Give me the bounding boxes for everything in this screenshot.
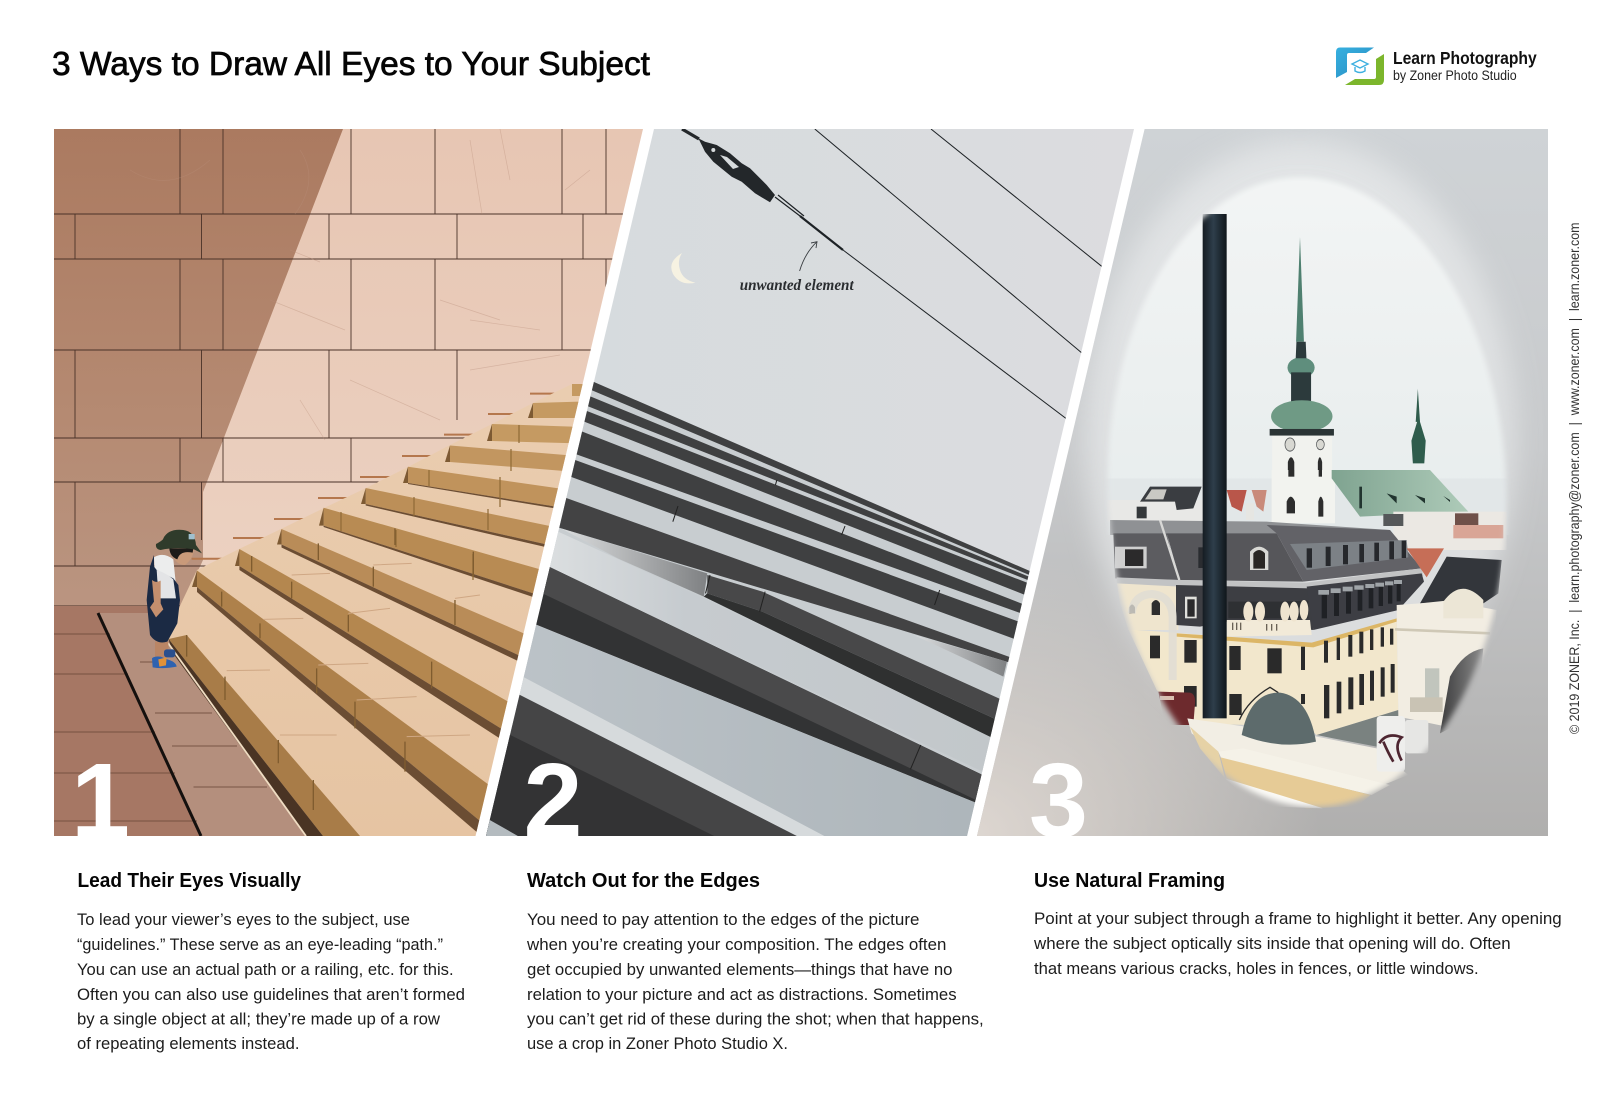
body text 2: [526, 911, 984, 1053]
dormer caps: [1318, 580, 1402, 595]
main ridge light roof: [1110, 520, 1393, 537]
shoe accents: [158, 657, 167, 667]
ornate gable: [1443, 589, 1483, 618]
annotation arrow: [800, 242, 817, 271]
upper dormer windows: [1307, 541, 1406, 568]
sill tan side: [1190, 727, 1225, 778]
body text 1: “guidelines.” These serve as an eye-leading “path.”: [77, 936, 443, 954]
facade cornice: [1117, 568, 1423, 589]
roof dormers: [1359, 487, 1450, 508]
child legs: [155, 642, 168, 657]
wire turnbuckle: [682, 129, 775, 202]
pale skylight: [1145, 489, 1167, 499]
wall block joints: [54, 129, 640, 606]
tier window: [1185, 597, 1197, 618]
right lower dormers: [1322, 584, 1401, 618]
red roofs: [1227, 490, 1247, 512]
view through the oval: [1089, 158, 1536, 808]
left roof slope: [1113, 533, 1178, 580]
small white tower: [1246, 503, 1254, 520]
panel 2: photo of wires and building: [470, 129, 1150, 860]
dark upper building stripes: [559, 382, 1030, 662]
child hair: [169, 548, 193, 559]
dark arch: [1440, 648, 1483, 733]
stair shadows under risers: [169, 483, 577, 852]
middle band underside: [704, 593, 1007, 742]
child shirt: [154, 554, 176, 582]
logo wordmark: Learn Photography: [1393, 48, 1537, 68]
pale stair edge line: [168, 643, 306, 836]
stair treads: [168, 384, 582, 836]
body text 2: when you’re creating your composition. The edges often: [526, 936, 946, 954]
window frame post: [1203, 214, 1227, 718]
warm glow bottom-left: [970, 429, 1470, 836]
right ornate building: [1397, 601, 1497, 727]
belfry: [1291, 372, 1311, 405]
cable in the glass: [1379, 735, 1402, 762]
tier window glass: [1187, 599, 1195, 617]
column 2 text: [526, 870, 984, 1053]
light corner: [485, 818, 518, 836]
stair end notches: [192, 403, 533, 587]
child arm and hand: [150, 580, 163, 617]
balcony dark windows: [1228, 601, 1308, 618]
building base: [510, 382, 1030, 836]
body text 1: Often you can also use guidelines that aren’t formed: [77, 986, 465, 1004]
tower base: [1272, 470, 1335, 523]
child face: [174, 550, 194, 565]
right window: [1425, 668, 1439, 699]
body text 3: Point at your subject through a frame to highlight it better. Any opening: [1034, 910, 1562, 928]
title: 3 Ways to Draw All Eyes to Your Subject: [52, 45, 650, 82]
dark chimney: [1383, 514, 1403, 526]
second glass: [1405, 720, 1428, 753]
body text 2: You need to pay attention to the edges of the picture: [527, 911, 919, 929]
facade windows: [1150, 627, 1395, 718]
centre dormer: [1250, 547, 1268, 570]
upper scene: sky and church: [1089, 158, 1536, 535]
lantern base: [1296, 342, 1306, 358]
right white buildings: [1393, 512, 1507, 550]
left framed window: [1115, 547, 1147, 568]
left cream facade top: [1117, 582, 1178, 630]
rear shoe: [164, 649, 175, 657]
vertical credits: © 2019 ZONER, Inc. | learn.photography@zoner.com | www.zoner.com | learn.zoner.com: [1567, 222, 1582, 734]
black ground crack: [98, 613, 201, 836]
left window glass: [1125, 549, 1143, 566]
small arched dormer: [1198, 547, 1203, 568]
stone surface cracks: [130, 129, 590, 440]
child figure: [147, 530, 202, 668]
pale halo around opening: [1085, 140, 1515, 740]
body text 3: where the subject optically sits inside that opening will do. Often: [1033, 935, 1511, 953]
red box inner highlight: [1160, 696, 1174, 700]
green nave roof: [1332, 470, 1468, 517]
number 2: 2: [524, 742, 582, 860]
thick lower band grey face: [525, 555, 997, 808]
second red roof: [1252, 490, 1267, 512]
lamp cord: [1239, 687, 1278, 720]
pink building right: [1453, 525, 1503, 538]
child hat: [156, 530, 202, 553]
sill tan front: [1221, 757, 1371, 808]
lower facade: [1128, 618, 1398, 735]
column 1 text: [77, 870, 465, 1053]
frosted glass background: [970, 129, 1560, 836]
annotation: unwanted element: unwanted element: [740, 277, 854, 294]
centre roof slope: [1167, 533, 1303, 582]
glass cup: [1377, 716, 1405, 772]
courtyard glass: [1317, 710, 1400, 747]
heading 1: Lead Their Eyes Visually: [78, 870, 302, 892]
tower lower windows: [1287, 470, 1323, 517]
tower clock faces: [1285, 438, 1324, 451]
lit strip: [550, 532, 990, 772]
church tower: [1272, 435, 1332, 522]
column 3 text: [1033, 870, 1562, 978]
paving strip beside stairs: [98, 613, 307, 836]
diagonal wall shadow: [54, 129, 343, 610]
white rooftop houses left: [1107, 500, 1203, 522]
wall ledge marks: [192, 394, 570, 559]
lower riser seams: [187, 528, 473, 810]
lower dark band: [480, 683, 797, 836]
balustrade statues: [1243, 600, 1308, 622]
tread joints: [227, 563, 480, 737]
pale roof ridge line: [1160, 520, 1179, 580]
child overalls: [147, 555, 180, 642]
window sill: [1187, 718, 1408, 785]
pale lower crescent: [1225, 778, 1323, 808]
pale lit strip: [497, 665, 828, 847]
small dark window: [1137, 507, 1147, 518]
distant city band: [1089, 478, 1536, 535]
red box on the sill: [1158, 692, 1195, 725]
lower scene: city buildings: [1107, 214, 1507, 808]
lower darkest band: [480, 720, 714, 836]
central dark tier: [1176, 585, 1313, 630]
thick lower band base: [525, 555, 997, 808]
paving joints: [54, 634, 267, 821]
sill front lip: [1218, 748, 1390, 795]
hat badge: [189, 534, 195, 539]
body text 2: get occupied by unwanted elements—things that have no: [527, 961, 952, 979]
body text 1: [77, 911, 465, 1053]
number 1: 1: [71, 742, 130, 860]
body text 3: that means various cracks, holes in fences, or little windows.: [1034, 960, 1479, 978]
second spire: [1411, 389, 1426, 463]
middle dark band: [707, 575, 1007, 724]
sky: [1089, 158, 1536, 497]
tower windows: [1288, 457, 1322, 476]
lower building drawn in crop scale: [480, 480, 1007, 847]
ground paving: [54, 606, 200, 836]
heading 2: Watch Out for the Edges: [527, 870, 760, 892]
body text 1: of repeating elements instead.: [77, 1035, 300, 1053]
body text 1: You can use an actual path or a railing, etc. for this.: [77, 961, 454, 979]
body text 3: [1033, 910, 1562, 978]
right upper roof: [1267, 525, 1422, 582]
stair risers: [169, 384, 600, 838]
dome: [1271, 400, 1332, 432]
red roof right: [1407, 548, 1444, 577]
front shoe: [152, 657, 177, 668]
ochre cornice shadow: [1177, 618, 1397, 647]
blue-grey panel: [508, 613, 997, 847]
power wires: [775, 129, 1115, 429]
facade balustrade bars: [1233, 623, 1277, 631]
band seams: [673, 480, 940, 769]
number 3: 3: [1029, 742, 1088, 860]
right cornice: [1395, 629, 1490, 633]
right dormer band: [1290, 540, 1408, 570]
balustrade: [1227, 620, 1312, 637]
left arched windows: [1129, 600, 1160, 615]
body text 2: use a crop in Zoner Photo Studio X.: [527, 1035, 788, 1053]
icon: logo frame with graduation cap: [1336, 48, 1384, 85]
crescent moon: [671, 253, 696, 283]
lower stair seams and kid group: [147, 528, 480, 810]
panel 1: photo of child at stairs: [54, 129, 654, 860]
panel 3: photo through an oval opening: [970, 129, 1560, 860]
overall strap and shirt: [157, 570, 176, 598]
reflected arch on glass: [1132, 594, 1173, 680]
dark rooftop left: [1140, 487, 1202, 510]
lantern: [1287, 357, 1315, 378]
body text 2: you can’t get rid of these during the shot; when that happens,: [527, 1010, 984, 1028]
centre dormer glass: [1253, 550, 1265, 569]
dome ring: [1270, 429, 1334, 436]
brown block right: [1455, 513, 1478, 525]
upper riser seams: [341, 425, 519, 580]
body text 1: To lead your viewer’s eyes to the subject, use: [77, 911, 410, 929]
right dark tier: [1307, 573, 1424, 630]
sunlit stone wall: [199, 129, 643, 609]
left shaded wedge: [561, 528, 707, 597]
right shaded wedge: [914, 635, 1007, 677]
logo tagline: by Zoner Photo Studio: [1393, 68, 1517, 83]
logo: Learn Photography by Zoner Photo Studio: [1336, 48, 1537, 85]
main spire: [1296, 237, 1304, 342]
body text 1: by a single object at all; they’re made up of a row: [77, 1010, 440, 1028]
lamp dome: [1242, 693, 1316, 745]
grey sky: [536, 129, 1134, 774]
heading 3: Use Natural Framing: [1034, 870, 1225, 892]
right balcony: [1410, 697, 1443, 712]
right dark mansard roof: [1420, 557, 1502, 603]
body text 2: relation to your picture and act as distractions. Sometimes: [527, 986, 957, 1004]
